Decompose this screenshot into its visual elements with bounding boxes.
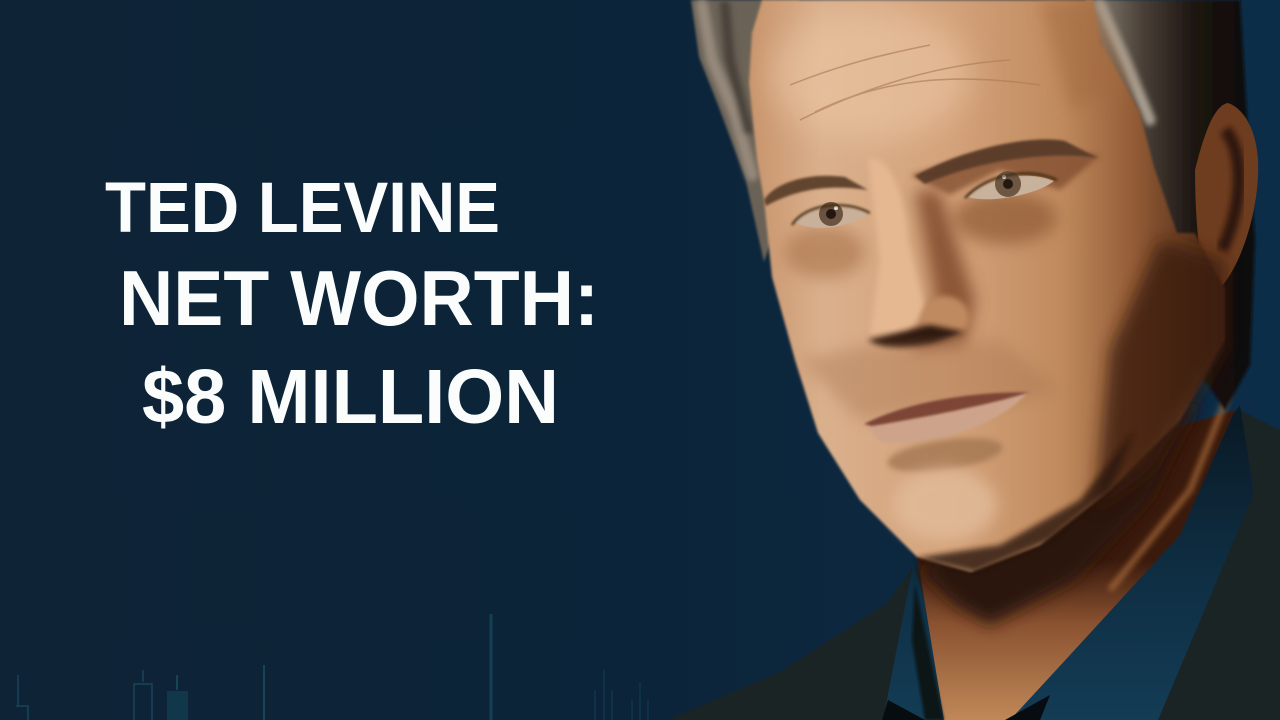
forehead highlight: [770, 10, 970, 140]
right eye: [965, 171, 1057, 199]
forehead centre shadow: [1040, 0, 1130, 110]
background candlestick chart: [16, 614, 648, 720]
neck: [917, 410, 1235, 720]
left eye socket: [785, 226, 865, 278]
neck highlight strip: [1110, 395, 1228, 590]
lips: [864, 392, 1030, 443]
right eye socket: [953, 192, 1057, 244]
title line 1: TED LEVINE: [105, 169, 500, 248]
shirt: [883, 405, 1254, 720]
face: [749, 0, 1225, 572]
title line 3: $8 MILLION: [142, 354, 559, 440]
chin highlight: [893, 469, 997, 541]
shirt collar shadow: [912, 585, 944, 720]
nose tip and nostril: [868, 296, 969, 348]
bottom collar: [882, 695, 1050, 720]
suit jacket: [668, 410, 1280, 720]
left eyebrow: [764, 176, 868, 206]
hair: [691, 0, 1255, 410]
nose bridge highlight: [868, 158, 925, 335]
portrait of man: [668, 0, 1280, 720]
hair highlights: [702, 5, 1150, 175]
nose shadow: [910, 190, 975, 350]
title line 2: NET WORTH:: [119, 254, 599, 342]
forehead wrinkles: [790, 45, 1040, 120]
jaw shadow: [915, 430, 1135, 572]
right cheek shadow: [1095, 240, 1225, 510]
left eye: [792, 202, 870, 228]
brow shadow: [910, 150, 1100, 195]
ear: [1195, 103, 1258, 295]
title: [105, 169, 599, 440]
nasolabial and upper lip shade: [800, 340, 1060, 420]
under-lip shadow: [885, 432, 1005, 478]
neck shadow: [920, 400, 1200, 625]
right eyebrow: [915, 139, 1098, 184]
